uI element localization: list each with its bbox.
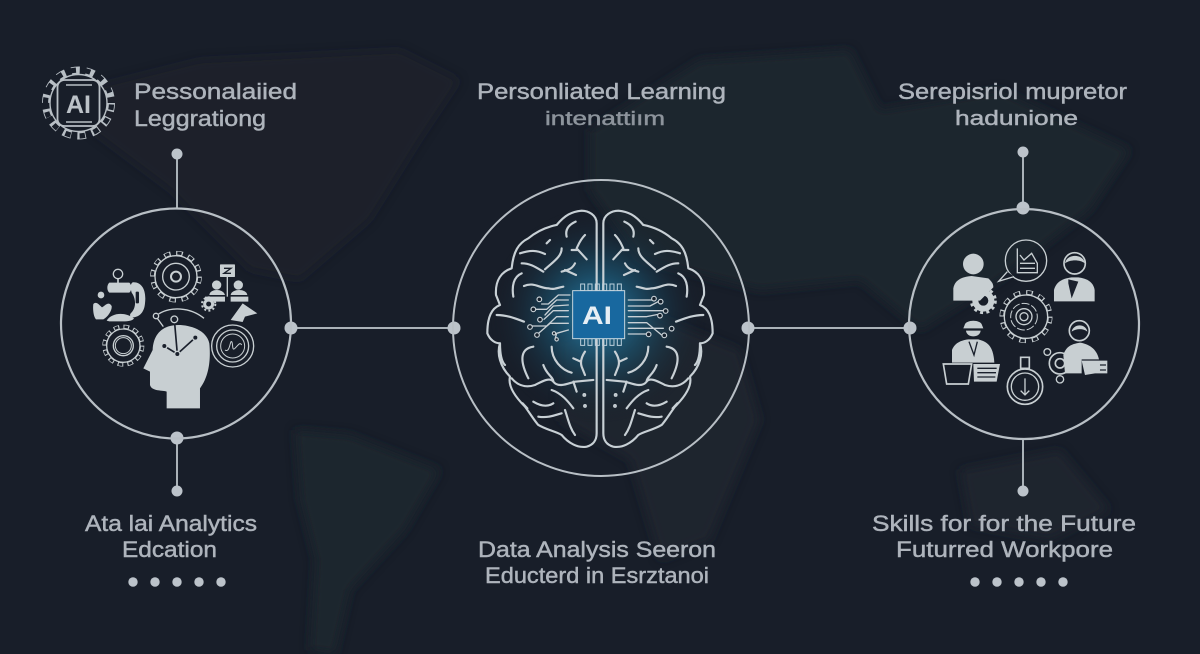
heading: top left xyxy=(134,79,297,131)
panel: center circle with brain xyxy=(453,180,749,476)
caption: bottom right: Skills for for the Future xyxy=(872,511,1136,536)
caption: bottom center: Data Analysis Seeron xyxy=(478,537,716,562)
paper plane xyxy=(231,303,257,322)
icon: AI chip gear: AI xyxy=(66,91,91,119)
icon: AI chip gear xyxy=(46,70,112,136)
icon cluster: head and gears xyxy=(93,253,257,408)
heading: top left: Pessonalaiied xyxy=(134,79,297,104)
dots: bottom right xyxy=(970,577,1068,587)
heading: top center: intenattiım xyxy=(545,109,665,130)
connectors xyxy=(170,146,1030,496)
caption: bottom left: Edcation xyxy=(122,537,217,562)
heading: top right: hadunione xyxy=(955,108,1078,130)
panel: right circle xyxy=(909,209,1139,439)
icon: AI chip xyxy=(573,284,625,345)
caption: bottom center: Educterd in Esrztanoi xyxy=(485,563,709,588)
brain outline xyxy=(487,211,713,447)
caption: bottom center xyxy=(478,537,716,588)
caption: bottom right xyxy=(872,511,1136,562)
heading: top center: Personliated Learning xyxy=(477,79,726,104)
heading: top left: Leggrationg xyxy=(134,106,266,131)
caption: bottom right: Futurred Workpore xyxy=(896,537,1113,562)
heading: top right: Serepisriol mupretor xyxy=(898,79,1127,104)
caption: bottom left xyxy=(85,511,257,562)
heading: top center xyxy=(477,79,726,130)
panel: left circle xyxy=(61,208,291,438)
teamwork sign xyxy=(220,264,235,277)
glow xyxy=(490,207,706,423)
caption: bottom left: Ata lai Analytics xyxy=(85,511,257,536)
icon cluster: people and gears xyxy=(943,240,1107,404)
robot group xyxy=(93,282,145,321)
dots: bottom left xyxy=(128,577,226,587)
icon: AI chip: AI xyxy=(582,302,612,330)
heading: top right xyxy=(898,79,1127,130)
